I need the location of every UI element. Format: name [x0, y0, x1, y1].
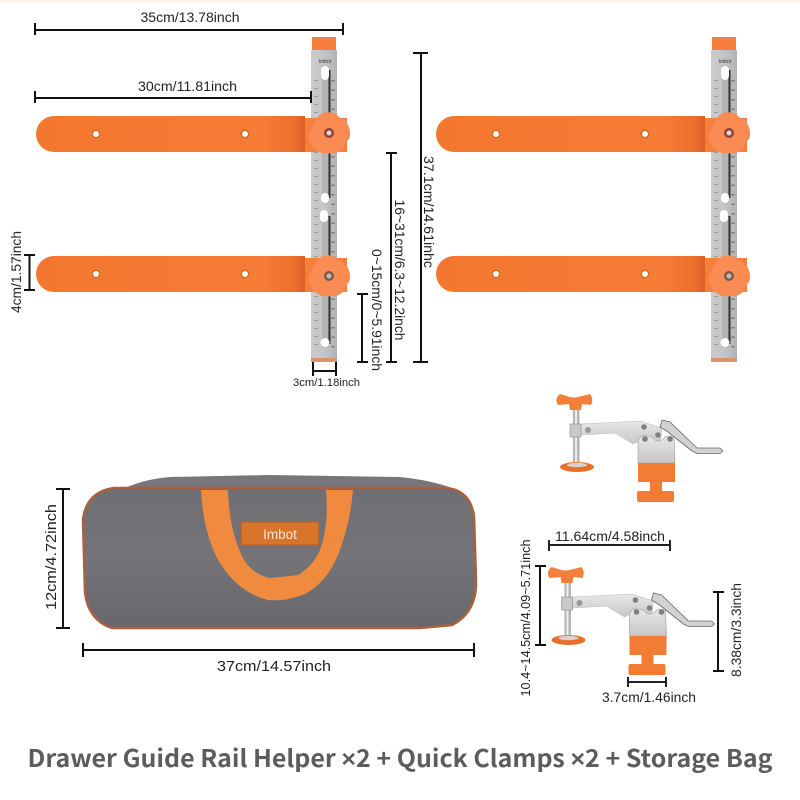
dimension: 0~15cm travel: 0~15cm/0~5.91inch: [369, 249, 385, 371]
dimension: 37.1cm rail length: [413, 53, 437, 362]
dimension: 11.64cm clamp length: [549, 528, 670, 551]
bag back panel: [125, 475, 452, 488]
dimension: 10.4~14.5cm clamp height: 10.4~14.5cm/4.09~5.71inch: [518, 540, 533, 696]
dimension: 30cm arm length: 30cm/11.81inch: [138, 78, 237, 94]
dimension: 37cm bag length: [83, 643, 474, 675]
dimension: 37cm bag length: 37cm/14.57inch: [217, 658, 331, 675]
left rail helper with orange arms: [36, 37, 350, 362]
storage bag: [83, 475, 476, 628]
dimension: 4cm arm width: [8, 231, 35, 313]
dimension: 12cm bag height: [43, 489, 70, 628]
dimension: 3cm rail width: [293, 362, 360, 389]
rail logo: Imbot: [319, 59, 332, 65]
quick clamp, upper: [556, 394, 723, 502]
dimension: 16~31cm travel: [386, 153, 408, 362]
dimension: 3.7cm clamp base: 3.7cm/1.46inch: [602, 690, 696, 705]
dimension: 10.4~14.5cm clamp height: [518, 540, 546, 696]
dimension: 11.64cm clamp length: 11.64cm/4.58inch: [555, 528, 665, 544]
bag body: [83, 488, 476, 628]
dimension: 30cm arm length: [35, 78, 311, 103]
dimension: 4cm arm width: 4cm/1.57inch: [8, 231, 24, 313]
bag label patch: Imbot: [263, 527, 297, 542]
bag label patch: [241, 522, 319, 545]
dimension: 35cm overall length: [35, 9, 343, 35]
dimension: 35cm overall length: 35cm/13.78inch: [140, 9, 240, 25]
dimension: 3.7cm clamp base: [602, 677, 696, 705]
dimension: 0~15cm travel: [357, 249, 385, 371]
right rail helper with orange arms: [436, 37, 750, 362]
quick clamp, lower: [548, 567, 714, 675]
dimension: 3cm rail width: 3cm/1.18inch: [293, 377, 360, 389]
title caption: Drawer Guide Rail Helper ×2 + Quick Clamps ×2 + Storage Bag: [28, 739, 772, 774]
dimension: 37.1cm rail length: 37.1cm/14.61inhc: [421, 156, 437, 268]
dimension: 16~31cm travel: 16~31cm/6.3~12.2inch: [392, 200, 408, 340]
dimension: 8.38cm clamp depth: [713, 583, 744, 677]
dimension: 8.38cm clamp depth: 8.38cm/3.3inch: [729, 583, 744, 677]
rail logo: Imbot: [719, 59, 732, 65]
bag handle: [201, 490, 353, 600]
dimension: 12cm bag height: 12cm/4.72inch: [43, 504, 60, 610]
